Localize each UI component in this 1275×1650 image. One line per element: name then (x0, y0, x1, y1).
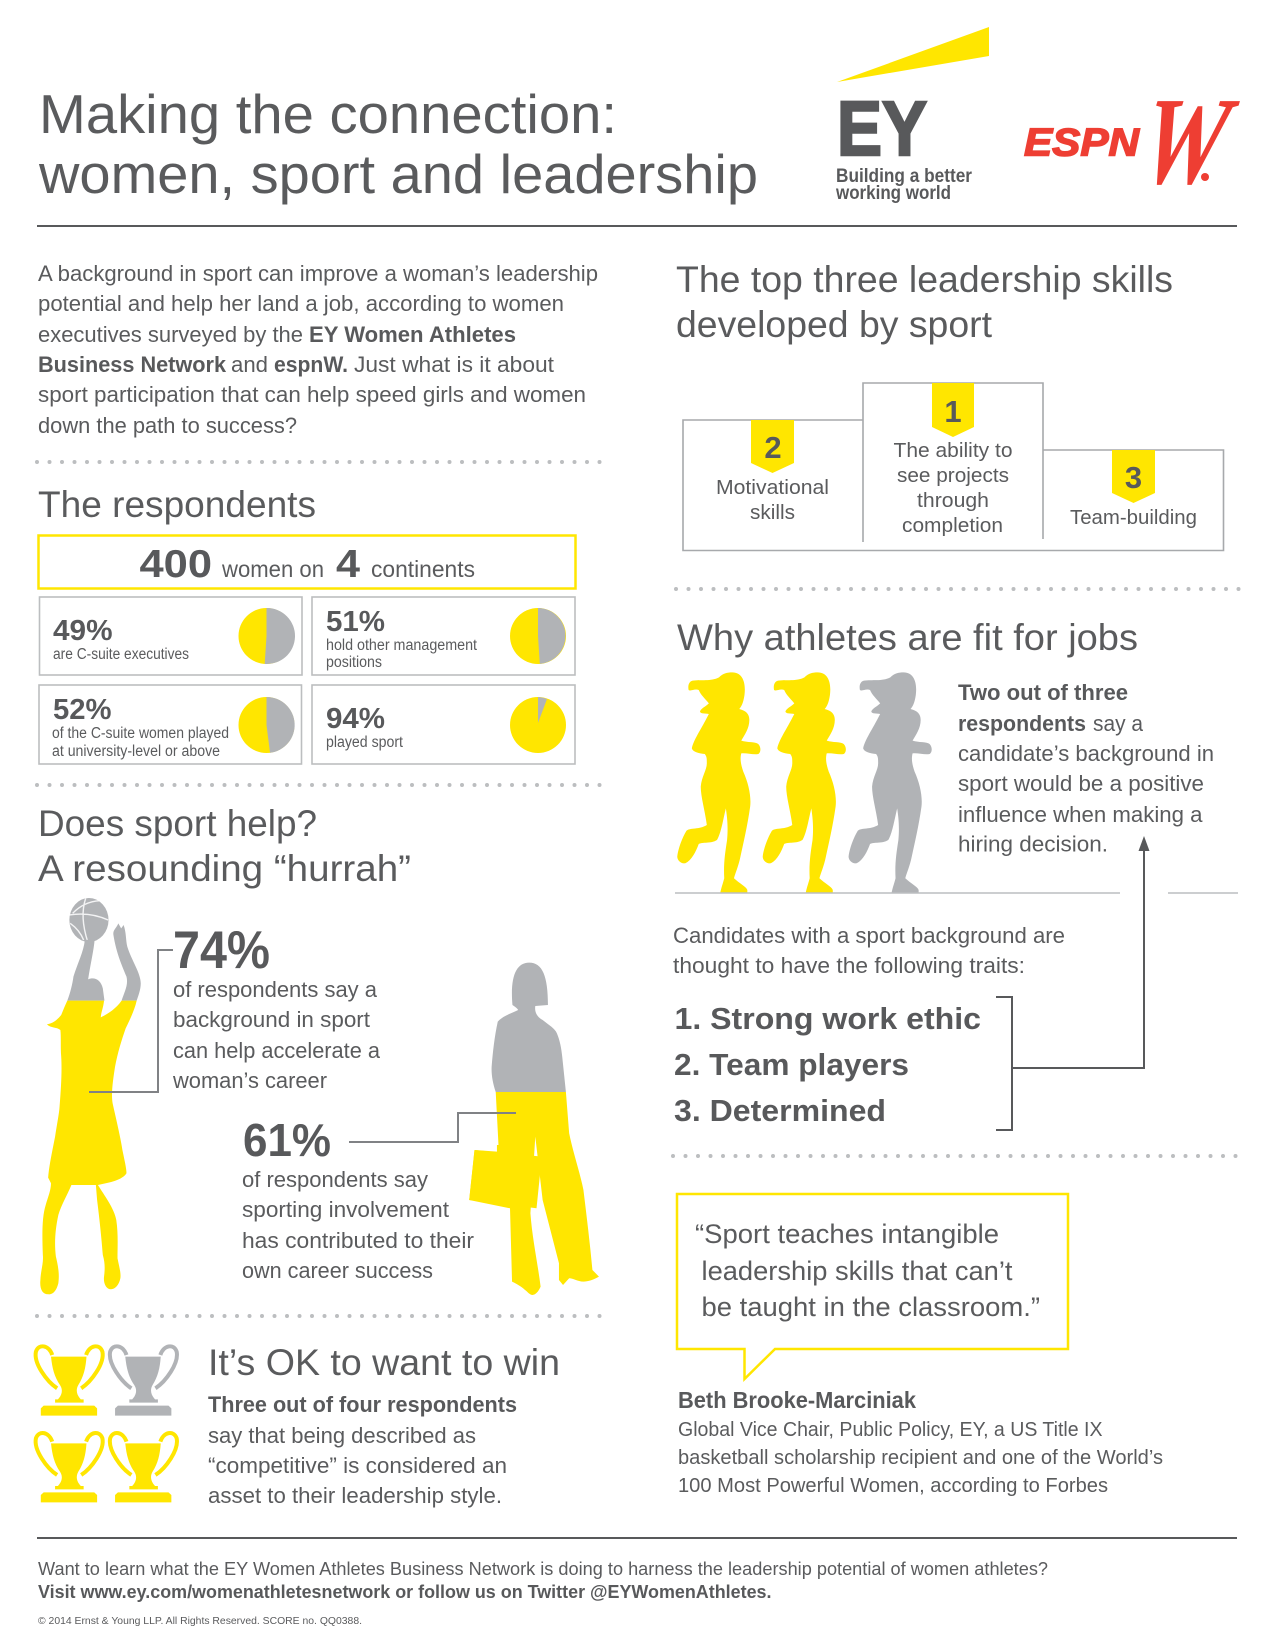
connector: 74% (89, 950, 173, 1092)
icon: three runners (677, 672, 932, 893)
callout: quote: “Sport teaches intangible (695, 1219, 999, 1249)
callout: 400 women on 4 continents: continents (371, 556, 475, 582)
logo: EY: Building a better (836, 166, 973, 187)
stat: 61%: own career success (242, 1258, 433, 1283)
stat: 74%: 74% (173, 921, 270, 980)
stat: 52% university level (39, 685, 302, 764)
text: competitive: say that being described as (208, 1423, 476, 1448)
footer (38, 1559, 1048, 1627)
stat: 61%: has contributed to their (242, 1228, 475, 1253)
podium: second place: skills (750, 502, 795, 524)
text: attribution: 100 Most Powerful Women, according to Forbes (678, 1475, 1108, 1497)
podium: first place: completion (902, 515, 1003, 537)
text: competitive (208, 1392, 517, 1508)
title: women, sport and leadership (38, 143, 758, 205)
pie: 52% (238, 697, 295, 753)
stat: 74%: woman’s career (172, 1068, 327, 1093)
podium: second place: Motivational (716, 477, 829, 499)
arrow: bracket to text (996, 836, 1150, 1130)
podium: second place: 2 (764, 430, 782, 465)
text: candidates: Candidates with a sport background are (673, 923, 1065, 948)
text: attribution: Global Vice Chair, Public Policy, EY, a US Title IX (678, 1419, 1102, 1441)
podium: third place: 3 (1125, 460, 1142, 495)
podium chart (683, 383, 1224, 550)
callout: 400 women on 4 continents: 400 (140, 543, 212, 586)
stat: 52% university level: of the C-suite women played (52, 725, 229, 742)
heading: it's ok to want to win: It’s OK to want to win (208, 1342, 560, 1383)
icon: trophy 4 (110, 1433, 177, 1502)
callout: 400 women on 4 continents: 4 (336, 543, 360, 586)
stat: 61%: sporting involvement (242, 1197, 450, 1222)
logo: EY: working world (835, 183, 951, 204)
stat: 94% played sport: 94% (326, 703, 385, 735)
heading: does sport help: A resounding “hurrah” (38, 848, 411, 889)
stat: 74% (172, 921, 380, 1093)
text: two out of three: sport would be a positive (958, 771, 1204, 796)
icon: runner 3 (849, 672, 932, 893)
intro text: down the path to success? (38, 413, 297, 438)
podium: second place (716, 420, 829, 524)
heading: top three skills: developed by sport (676, 304, 993, 345)
text: attribution (678, 1387, 1163, 1497)
heading: does sport help (38, 803, 411, 889)
callout: quote: leadership skills that can’t (702, 1256, 1013, 1286)
list: three traits (674, 1001, 981, 1128)
stat: 52% university level: 52% (53, 694, 112, 726)
stat: 61%: of respondents say (242, 1167, 429, 1192)
podium: first place: through (917, 490, 989, 512)
stat: 74%: of respondents say a (173, 977, 377, 1002)
stat: 74%: can help accelerate a (173, 1038, 380, 1063)
text: two out of three: influence when making a (958, 802, 1203, 827)
logo: EY (835, 27, 989, 204)
callout: 400 women on 4 continents (38, 536, 576, 588)
icon: runner 2 (763, 672, 846, 893)
text: competitive: asset to their leadership style. (208, 1483, 502, 1508)
intro text: A background in sport can improve a woman’s leadership (38, 261, 598, 286)
heading: top three skills: The top three leadership skills (676, 259, 1173, 300)
logo: espnW: ESPN (1024, 122, 1140, 164)
stat: 51% other management: hold other management (326, 637, 478, 654)
icon: businesswoman silhouette (469, 963, 599, 1295)
intro text: espnW. (274, 352, 348, 377)
stat: 61% (242, 1114, 475, 1283)
stat: 49% C-suite: 49% (53, 615, 113, 647)
icon: trophy 1 (36, 1346, 103, 1416)
stat: 49% C-suite (40, 597, 302, 675)
footer: Want to learn what the EY Women Athletes Business Network is doing to harness the leadership potential of women athletes? (38, 1559, 1048, 1579)
heading: why athletes are fit: Why athletes are fit for jobs (677, 617, 1138, 658)
text: candidates: thought to have the following traits: (673, 953, 1025, 978)
text: candidates (673, 923, 1065, 978)
pie: 49% (238, 608, 295, 664)
stat: 51% other management (312, 597, 575, 675)
stat: 52% university level: at university-level or above (52, 743, 220, 760)
intro text: Just what is it about (354, 352, 555, 377)
heading: top three skills (676, 259, 1173, 345)
podium: first place (894, 383, 1012, 537)
intro text: potential and help her land a job, according to women (38, 291, 564, 316)
podium: first place: The ability to (894, 440, 1012, 462)
icon: trophy 3 (36, 1433, 103, 1502)
text: competitive: “competitive” is considered an (208, 1453, 507, 1478)
icon: basketball player silhouette (40, 898, 141, 1294)
heading: the respondents: The respondents (38, 484, 316, 525)
footer: © 2014 Ernst & Young LLP. All Rights Reserved. SCORE no. QQ0388. (38, 1615, 362, 1627)
stat: 94% played sport: played sport (326, 734, 404, 751)
text: attribution: basketball scholarship recipient and one of the World’s (678, 1447, 1163, 1469)
podium: third place: Team-building (1070, 507, 1197, 529)
podium: first place: see projects (897, 465, 1009, 487)
callout: quote: be taught in the classroom.” (702, 1292, 1040, 1322)
logo: espnW: W (1131, 73, 1245, 211)
icon: runner 1 (677, 672, 760, 893)
intro text: Business Network (38, 352, 226, 377)
title: Making the connection: (39, 83, 617, 145)
text: two out of three: Two out of three (958, 680, 1128, 705)
podium: third place (1070, 450, 1197, 529)
stat: 94% played sport (312, 685, 575, 764)
text: two out of three: respondents (958, 711, 1086, 736)
stat: 51% other management: 51% (326, 606, 385, 638)
text: two out of three: candidate’s background in (958, 741, 1214, 766)
list: three traits: 1. Strong work ethic (674, 1001, 981, 1036)
logo: EY: EY (837, 86, 927, 172)
intro text: EY Women Athletes (309, 322, 516, 347)
callout: quote (677, 1194, 1068, 1379)
intro text: executives surveyed by the (38, 322, 303, 347)
footer: Visit www.ey.com/womenathletesnetwork or follow us on Twitter @EYWomenAthletes. (38, 1582, 772, 1602)
icon: four trophies (36, 1346, 177, 1502)
text: competitive: Three out of four respondents (208, 1392, 517, 1417)
heading: does sport help: Does sport help? (38, 803, 317, 844)
list: three traits: 2. Team players (674, 1047, 909, 1082)
logo: espnW (1024, 73, 1245, 211)
title (38, 83, 758, 205)
list: three traits: 3. Determined (674, 1093, 886, 1128)
text: two out of three: hiring decision. (958, 832, 1108, 856)
stat: 51% other management: positions (326, 654, 382, 671)
pie: 51% (510, 608, 566, 664)
connector: 61% (349, 1113, 516, 1142)
stat: 61%: 61% (243, 1114, 331, 1166)
stat: 49% C-suite: are C-suite executives (53, 646, 189, 663)
intro text: sport participation that can help speed girls and women (38, 382, 586, 407)
text: two out of three: say a (1093, 711, 1143, 736)
intro text: and (231, 352, 268, 377)
text: two out of three (958, 680, 1214, 856)
callout: 400 women on 4 continents: women on (221, 556, 324, 582)
stat: 74%: background in sport (173, 1007, 371, 1032)
intro text (38, 261, 598, 438)
icon: trophy 2 (110, 1346, 177, 1416)
podium: first place: 1 (944, 394, 962, 429)
pie: 94% (510, 697, 566, 753)
text: attribution: Beth Brooke-Marciniak (678, 1387, 916, 1413)
